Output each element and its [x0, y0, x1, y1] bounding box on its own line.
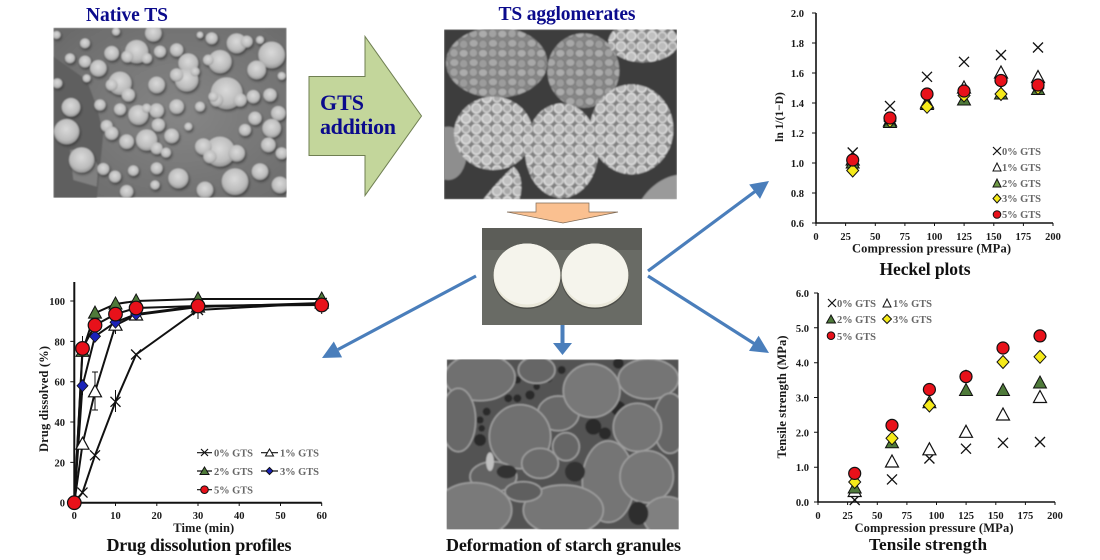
arrow: orange down arrow	[507, 203, 618, 223]
y-axis labels: 20	[54, 458, 65, 469]
x-axis title: Compression pressure (MPa)	[852, 242, 1011, 256]
title: TS agglomerates: TS agglomerates	[498, 4, 636, 25]
label: GTS addition: GTS	[320, 90, 364, 115]
arrow: GTS addition	[309, 36, 422, 196]
legend: 3% GTS	[893, 315, 932, 326]
legend	[197, 448, 319, 496]
photo: TS agglomerates SEM micrograph	[444, 29, 677, 200]
x-axis labels: 50	[870, 232, 881, 243]
y-axis labels	[49, 297, 65, 510]
series: 1% GTS	[846, 66, 1044, 165]
y-axis labels: 1.2	[791, 129, 804, 140]
caption: Drug dissolution profiles: Drug dissolution profiles	[106, 535, 292, 555]
y-axis labels: 6.0	[796, 289, 809, 300]
x-axis labels: 40	[234, 511, 244, 522]
series: 2% GTS	[846, 82, 1044, 168]
x-axis labels: 20	[152, 511, 162, 522]
y-axis labels: 0.8	[791, 189, 804, 200]
x-axis labels: 200	[1047, 511, 1063, 522]
legend: 3% GTS	[1002, 194, 1041, 205]
x-axis labels: 100	[929, 511, 944, 522]
x-axis title: Compression pressure (MPa)	[854, 521, 1014, 535]
y-axis labels: 40	[54, 418, 65, 429]
legend	[826, 299, 932, 343]
chart: Heckel plots	[774, 9, 1061, 256]
y-axis labels: 3.0	[796, 394, 809, 404]
legend: 3% GTS	[280, 467, 319, 478]
y-axis labels: 5.0	[796, 324, 809, 335]
y-axis labels: 0.6	[791, 219, 804, 230]
x-axis labels: 0	[813, 232, 819, 243]
x-axis labels: 100	[927, 232, 942, 243]
x-axis labels: 25	[840, 232, 851, 243]
x-axis title: Time (min)	[173, 521, 234, 535]
series: 2% GTS	[76, 292, 328, 356]
x-axis labels: 50	[275, 511, 286, 522]
arrow: to tensile strength	[648, 276, 769, 353]
y-axis labels: 80	[54, 337, 65, 348]
label: GTS addition: addition	[320, 114, 396, 139]
title: Native TS: Native TS	[86, 5, 168, 26]
photo: deformation SEM micrograph	[446, 359, 679, 530]
caption: Deformation of starch granules: Deformation of starch granules	[446, 535, 681, 555]
photo: two tablets	[482, 228, 642, 325]
x-axis labels: 150	[988, 511, 1004, 522]
legend: 0% GTS	[214, 448, 253, 460]
x-axis labels	[72, 511, 327, 522]
legend: 2% GTS	[837, 315, 876, 326]
x-axis labels: 75	[902, 511, 912, 522]
x-axis labels: 75	[900, 232, 910, 243]
series: 3% GTS	[847, 82, 1044, 177]
y-axis labels: 4.0	[796, 359, 809, 370]
legend: 5% GTS	[214, 486, 253, 496]
arrow: to deformation image	[553, 325, 572, 355]
legend: 2% GTS	[214, 467, 253, 478]
series: 3% GTS	[77, 298, 327, 392]
y-axis labels: 0	[60, 499, 65, 510]
y-axis title: ln 1/(1−D)	[774, 92, 786, 142]
x-axis labels: 50	[872, 511, 883, 522]
x-axis labels: 125	[958, 511, 974, 522]
x-axis labels: 0	[815, 511, 821, 522]
y-axis labels: 0.0	[796, 498, 809, 509]
legend: 1% GTS	[1002, 163, 1041, 174]
y-axis title: Drug dissolved (%)	[37, 346, 51, 452]
legend: 1% GTS	[893, 299, 932, 310]
chart: Tensile strength	[775, 289, 1063, 535]
x-axis labels: 60	[316, 511, 327, 522]
arrow: to drug dissolution	[322, 276, 476, 358]
x-axis labels: 0	[72, 511, 77, 522]
y-axis labels	[791, 9, 805, 230]
y-axis labels: 1.8	[791, 39, 804, 50]
y-axis labels	[796, 289, 809, 509]
x-axis labels	[813, 232, 1061, 243]
chart: Drug dissolution profiles	[37, 282, 329, 535]
photo: native TS SEM micrograph	[52, 25, 288, 200]
x-axis labels: 125	[956, 232, 972, 243]
x-axis labels: 200	[1045, 232, 1061, 243]
x-axis labels: 25	[842, 511, 853, 522]
y-axis title: Tensile strength (MPa)	[775, 336, 789, 458]
caption: Heckel plots: Heckel plots	[880, 259, 971, 279]
series: 3% GTS	[849, 350, 1046, 488]
legend: 1% GTS	[280, 448, 319, 460]
y-axis labels: 2.0	[791, 9, 804, 20]
x-axis labels: 175	[1018, 511, 1033, 522]
caption: Tensile strength: Tensile strength	[869, 535, 987, 554]
y-axis labels: 1.6	[791, 69, 804, 80]
series lines	[74, 299, 322, 503]
series: 0% GTS	[78, 298, 327, 498]
series: 1% GTS	[848, 390, 1046, 496]
series: 5% GTS	[847, 74, 1044, 166]
series: 1% GTS	[76, 296, 328, 449]
legend	[993, 147, 1041, 221]
y-axis labels: 1.0	[791, 159, 804, 170]
y-axis labels: 2.0	[796, 428, 809, 439]
y-axis labels: 1.0	[796, 463, 809, 474]
y-axis labels: 100	[49, 297, 65, 308]
legend: 2% GTS	[1002, 179, 1041, 190]
x-axis labels: 30	[193, 511, 203, 522]
x-axis labels	[815, 511, 1063, 522]
x-axis labels: 175	[1016, 232, 1031, 243]
x-axis labels: 150	[986, 232, 1002, 243]
arrow: to Heckel plots	[648, 181, 769, 271]
legend: 5% GTS	[837, 332, 876, 343]
series: 5% GTS	[849, 330, 1046, 479]
x-axis labels: 10	[110, 511, 121, 522]
legend: 0% GTS	[1002, 147, 1041, 158]
legend: 0% GTS	[837, 299, 876, 310]
series: 2% GTS	[848, 376, 1046, 493]
series: 0% GTS	[848, 42, 1043, 158]
y-axis labels: 60	[54, 378, 65, 389]
series: 5% GTS	[68, 298, 329, 510]
y-axis labels: 1.4	[791, 99, 805, 110]
error bars	[82, 296, 322, 412]
legend: 5% GTS	[1002, 210, 1041, 221]
series: 0% GTS	[850, 437, 1045, 505]
